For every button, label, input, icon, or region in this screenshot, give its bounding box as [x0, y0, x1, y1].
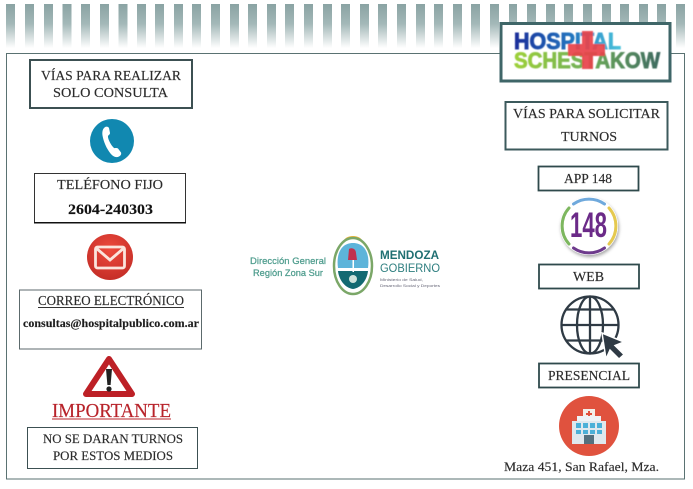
heading: important: IMPORTANTE [52, 400, 171, 422]
label: web: WEB [573, 269, 604, 284]
panel: appointments heading: VÍAS PARA SOLICITAR [513, 105, 661, 122]
central logo: Dirección General: Región Zona Sur [253, 268, 323, 279]
icon: warning triangle [86, 359, 132, 394]
callout: no appointments: POR ESTOS MEDIOS [53, 448, 173, 463]
central logo: Mendoza Gobierno: Desarrollo Social y Deportes [380, 283, 440, 288]
label: in person [539, 364, 639, 388]
striped header band [6, 4, 685, 48]
panel: consultation heading: SOLO CONSULTA [53, 86, 169, 101]
panel: email [20, 290, 202, 349]
central logo: Mendoza Gobierno [380, 250, 440, 288]
central logo: Mendoza Gobierno: Ministerio de Salud, [380, 277, 423, 282]
callout: no appointments: NO SE DARAN TURNOS [43, 431, 183, 446]
central logo: Mendoza Gobierno: GOBIERNO [380, 263, 440, 275]
panel: email: consultas@hospitalpublico.com.ar [23, 318, 199, 330]
callout: no appointments [28, 428, 198, 468]
hospital logo: SCHESTAKOW [514, 48, 661, 73]
central logo: Mendoza Gobierno: MENDOZA [380, 250, 439, 262]
hospital logo: HOSPITAL [514, 28, 621, 54]
label: app 148: APP 148 [564, 171, 612, 186]
panel: consultation heading [30, 60, 192, 108]
icon: globe with cursor [562, 296, 624, 359]
icon: telephone [90, 119, 134, 163]
hospital logo [501, 24, 670, 81]
label: app 148 [538, 166, 638, 190]
panel: landline phone: 2604-240303 [68, 202, 153, 218]
panel: landline phone: TELÉFONO FIJO [57, 176, 163, 193]
icon: hospital building [559, 396, 619, 456]
address: Maza 451, San Rafael, Mza. [504, 459, 659, 474]
icon: envelope [87, 234, 133, 280]
label: in person: PRESENCIAL [548, 368, 630, 383]
icon: 148 app: 148 [570, 206, 607, 245]
panel: landline phone [34, 174, 186, 224]
panel: email: CORREO ELECTRÓNICO [38, 293, 184, 308]
panel: appointments heading [506, 102, 668, 150]
label: web [539, 264, 639, 288]
central logo: Dirección General: Dirección General [250, 256, 326, 267]
icon: Mendoza coat of arms [334, 236, 372, 294]
panel: consultation heading: VÍAS PARA REALIZAR [41, 67, 182, 84]
panel: appointments heading: TURNOS [561, 130, 617, 145]
central logo: Dirección General [250, 256, 326, 279]
icon: 148 app [560, 197, 618, 255]
